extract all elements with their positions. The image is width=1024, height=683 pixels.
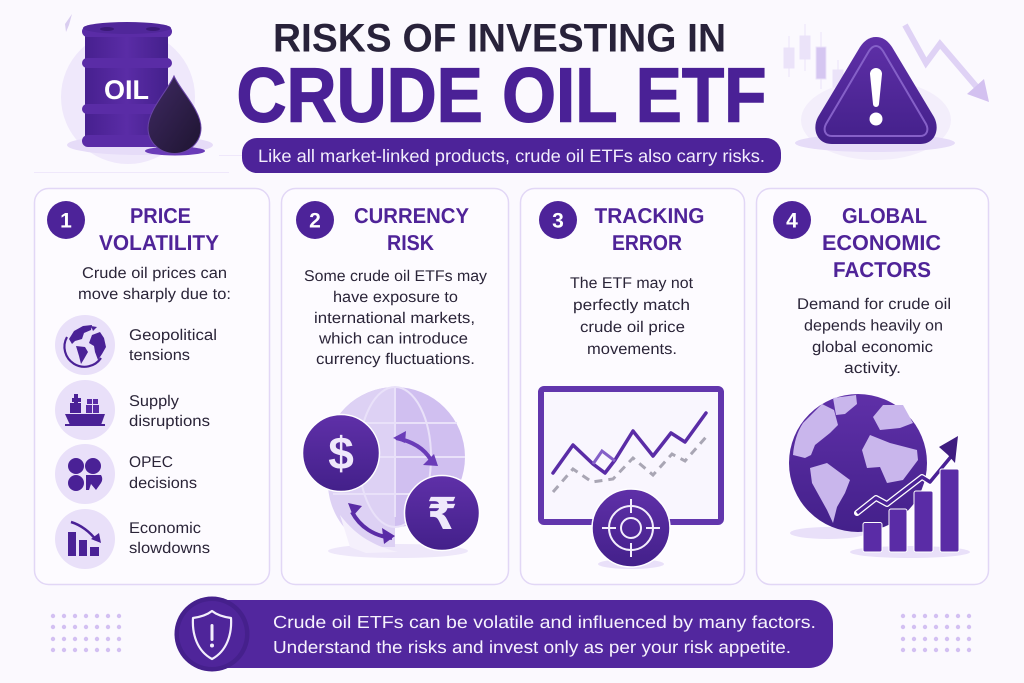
text: economic description: Demand for crude oil xyxy=(797,296,951,313)
panel: currency risk xyxy=(282,188,508,584)
item: geopolitical tensions xyxy=(55,315,217,375)
text: tracking description: The ETF may not xyxy=(570,275,694,292)
item: economic slowdowns xyxy=(55,509,210,569)
heading: global economic factors: FACTORS xyxy=(833,258,931,282)
panel: tracking error xyxy=(520,188,744,584)
subtitle pill: Like all market-linked products, crude oil ETFs also carry risks. xyxy=(258,146,765,166)
icon: shield xyxy=(174,596,250,672)
heading: global economic factors: GLOBAL xyxy=(842,204,927,228)
text: economic description: activity. xyxy=(844,360,901,377)
item: opec decisions: decisions xyxy=(129,475,197,492)
text: currency description: Some crude oil ETFs may xyxy=(304,268,487,285)
text: intro: move sharply due to: xyxy=(78,286,231,303)
text: economic description: depends heavily on xyxy=(804,318,943,334)
text: economic description: global economic xyxy=(812,339,933,356)
heading: currency risk xyxy=(354,204,469,255)
heading: price volatility: PRICE xyxy=(130,204,191,228)
text: currency description: have exposure to xyxy=(333,289,458,306)
text: banner message: Understand the risks and invest only as per your risk appetite. xyxy=(273,637,791,657)
subtitle pill xyxy=(242,138,781,173)
heading: price volatility: VOLATILITY xyxy=(99,231,219,255)
number badge 3 xyxy=(539,201,577,239)
illustration: globe with currency coins xyxy=(302,387,480,558)
number badge 1: 1 xyxy=(60,210,72,232)
heading: tracking error: ERROR xyxy=(612,231,682,255)
icon: oil barrel and drop: OIL xyxy=(104,75,149,105)
heading: global economic factors xyxy=(822,204,941,282)
item: opec decisions xyxy=(55,444,197,504)
number badge 4: 4 xyxy=(786,210,798,232)
decorative dots right xyxy=(901,614,971,652)
text: currency description: currency fluctuations. xyxy=(316,351,475,368)
illustration: globe and rising bars xyxy=(789,394,970,558)
item: supply disruptions: Supply xyxy=(129,393,179,410)
text: tracking description: movements. xyxy=(587,341,677,358)
number badge 2 xyxy=(296,201,334,239)
text: intro xyxy=(78,265,231,303)
item: geopolitical tensions: Geopolitical xyxy=(129,327,217,344)
illustration: globe with currency coins: ₹ xyxy=(427,489,457,540)
text: banner message xyxy=(273,612,816,657)
decorative dots left xyxy=(51,614,121,652)
panel: price volatility xyxy=(34,188,270,584)
title: RISKS OF INVESTING IN xyxy=(273,16,726,60)
text: economic description xyxy=(797,296,951,377)
text: banner message: Crude oil ETFs can be volatile and influenced by many factors. xyxy=(273,612,816,632)
panel: global economic factors xyxy=(756,188,988,584)
chart: tracking monitor xyxy=(541,389,721,569)
item: economic slowdowns: Economic xyxy=(129,520,201,537)
heading: currency risk: CURRENCY xyxy=(354,204,469,228)
text: currency description: which can introduce xyxy=(318,330,468,348)
heading: tracking error xyxy=(594,204,704,255)
illustration: globe with currency coins: $ xyxy=(328,427,354,479)
text: tracking description: perfectly match xyxy=(573,297,690,314)
item: economic slowdowns: slowdowns xyxy=(129,540,210,557)
icon: oil barrel and drop xyxy=(61,14,213,164)
title: CRUDE OIL ETF xyxy=(236,52,766,138)
text: currency description: international markets, xyxy=(314,310,475,327)
item: opec decisions: OPEC xyxy=(129,454,173,471)
icon: warning triangle with falling chart xyxy=(784,24,989,160)
text: tracking description: crude oil price xyxy=(580,319,685,336)
text: intro: Crude oil prices can xyxy=(82,265,227,282)
text: currency description xyxy=(304,268,487,368)
title xyxy=(236,16,766,138)
heading: global economic factors: ECONOMIC xyxy=(822,231,941,255)
heading: price volatility xyxy=(99,204,219,255)
number badge 4 xyxy=(773,201,811,239)
item: geopolitical tensions: tensions xyxy=(129,347,190,364)
text: tracking description xyxy=(570,275,694,358)
heading: tracking error: TRACKING xyxy=(594,204,704,228)
callout: bottom warning banner xyxy=(174,596,833,672)
number badge 1 xyxy=(47,201,85,239)
item: supply disruptions xyxy=(55,380,210,440)
item: supply disruptions: disruptions xyxy=(129,413,210,430)
number badge 3: 3 xyxy=(552,210,564,232)
number badge 2: 2 xyxy=(309,210,321,232)
heading: currency risk: RISK xyxy=(387,231,434,255)
